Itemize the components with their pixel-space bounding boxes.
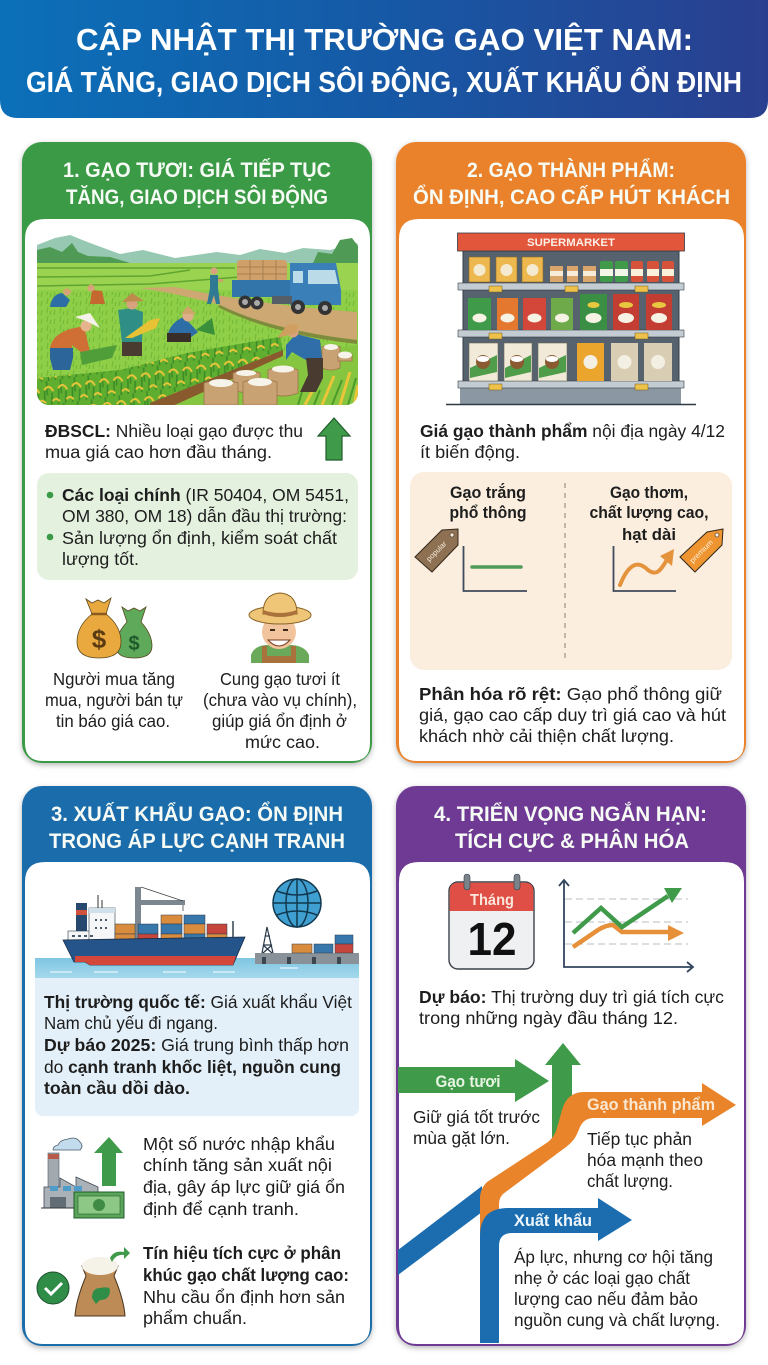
road (140, 287, 357, 340)
text: Mekong delta prices: mua giá cao hơn đầu tháng. (45, 442, 272, 462)
text: positive premium signal (143, 1243, 349, 1328)
text: buyers and sellers (45, 669, 183, 731)
arrow: export diagonal (398, 1186, 482, 1275)
text: forecast: Dự báo: Thị trường duy trì giá tích cực (419, 987, 724, 1007)
text: clear segmentation: Phân hóa rõ rệt: Gạo phổ thông giữ (419, 684, 722, 704)
text: forecast: trong những ngày đầu tháng 12. (419, 1008, 678, 1028)
icon: farmer (249, 593, 311, 663)
text: buyers and sellers: mua, người bán tự (45, 690, 183, 710)
icon: factory, arrow, banknote (41, 1137, 124, 1218)
callout: international market: do cạnh tranh khốc liệt, nguồn cung (44, 1057, 341, 1077)
icon: money bags: $ (92, 624, 107, 654)
arrow: exports: Xuất khẩu (514, 1211, 592, 1230)
icon: globe (273, 879, 321, 927)
text: fresh rice outlook (413, 1107, 540, 1148)
heading 1: TĂNG, GIAO DỊCH SÔI ĐỘNG (66, 185, 328, 209)
icon: premium tag: premium (688, 538, 715, 565)
text: finished rice outlook: chất lượng. (587, 1171, 673, 1191)
callout: main rice types: Các loại chính (IR 50404, OM 5451, (62, 485, 349, 505)
text: finished rice outlook: hóa mạnh theo (587, 1150, 703, 1170)
text: domestic price (420, 421, 725, 462)
text: finished rice outlook (587, 1129, 703, 1191)
callout: international market (35, 960, 359, 1116)
ditch (150, 350, 283, 405)
text: export outlook: nhẹ ở các loại gạo chất (514, 1268, 690, 1288)
text: importers raise production: Một số nước nhập khẩu (143, 1134, 335, 1154)
arrow: exports (480, 1198, 632, 1343)
text: positive premium signal: phẩm chuẩn. (143, 1308, 247, 1328)
label: premium rice: hạt dài (622, 525, 676, 544)
farmers (50, 268, 323, 392)
illustration: rice field harvest with truck (37, 235, 358, 405)
text: domestic price: Giá gạo thành phẩm nội địa ngày 4/12 (420, 421, 725, 441)
text: importers raise production: định để cạnh tranh. (143, 1199, 299, 1219)
callout: international market: Dự báo 2025: Giá trung bình thấp hơn (44, 1035, 349, 1055)
heading 3: 3. XUẤT KHẨU GẠO: ỔN ĐỊNH (51, 802, 343, 826)
arrow: finished rice (480, 1083, 736, 1240)
panel 2: finished rice (396, 142, 746, 763)
text: importers raise production: chính tăng sản xuất nội (143, 1155, 332, 1175)
icon: popular tag (415, 529, 458, 572)
comparison box (410, 472, 732, 670)
label: regular white rice: Gạo trắng (450, 483, 526, 502)
chart: price outlook lines (559, 880, 693, 972)
truck (232, 260, 341, 315)
callout: main rice types: Sản lượng ổn định, kiểm soát chất (62, 528, 337, 548)
label: premium rice (590, 483, 708, 544)
icon: calendar December: Tháng (470, 892, 514, 909)
panel 1: fresh rice (22, 142, 372, 763)
text: short fresh rice supply: mức cao. (245, 732, 320, 752)
text: Mekong delta prices (45, 421, 303, 462)
text: finished rice outlook: Tiếp tục phản (587, 1129, 692, 1149)
arrow: finished rice: Gạo thành phẩm (587, 1095, 715, 1114)
text: domestic price: ít biến động. (420, 442, 520, 462)
panel 4: short-term outlook (396, 786, 746, 1346)
foreground rice rows (37, 337, 283, 405)
text: Mekong delta prices: ĐBSCL: Nhiều loại gạo được thu (45, 421, 303, 441)
icon: check mark and rice sack (37, 1247, 130, 1316)
icon: up arrow (318, 418, 350, 460)
rice sacks (204, 345, 352, 405)
illustration: supermarket shelves: SUPERMARKET (527, 237, 615, 249)
text: importers raise production: địa, gây áp lực giữ giá ổn (143, 1177, 345, 1197)
icon: premium tag (680, 529, 723, 572)
heading 2 (413, 159, 730, 209)
label: premium rice: chất lượng cao, (590, 503, 708, 522)
callout: main rice types (37, 473, 358, 580)
text: clear segmentation: khách nhờ cải thiện chất lượng. (419, 726, 674, 746)
callout: main rice types: lượng tốt. (62, 549, 139, 569)
text: export outlook: Áp lực, nhưng cơ hội tăng (514, 1247, 713, 1267)
callout: international market: Thị trường quốc tế: Giá xuất khẩu Việt (44, 992, 352, 1012)
illustration: container ship at port (35, 887, 359, 978)
label: regular white rice (450, 483, 526, 522)
icon: calendar December: 12 (468, 913, 516, 965)
heading 2: ỔN ĐỊNH, CAO CẤP HÚT KHÁCH (413, 185, 730, 209)
heading 3: TRONG ÁP LỰC CẠNH TRANH (49, 830, 345, 853)
text: fresh rice outlook: mùa gặt lớn. (413, 1128, 510, 1148)
text: export outlook: nguồn cung và chất lượng. (514, 1310, 720, 1330)
text: short fresh rice supply (203, 669, 357, 752)
callout: main rice types: OM 380, OM 18) dẫn đầu thị trường: (62, 505, 347, 526)
text: positive premium signal: Nhu cầu ổn định hơn sản (143, 1287, 345, 1307)
callout: international market: toàn cầu dồi dào. (44, 1078, 190, 1098)
arrow: fresh rice: Gạo tươi (436, 1072, 500, 1091)
text: buyers and sellers: tin báo giá cao. (56, 711, 170, 731)
title banner: CẬP NHẬT THỊ TRƯỜNG GẠO VIỆT NAM: (76, 21, 693, 57)
label: premium rice: Gạo thơm, (610, 483, 688, 502)
chart: rising price (614, 546, 676, 591)
text: export outlook: lượng cao nếu đảm bảo (514, 1289, 698, 1309)
text: export outlook (514, 1247, 720, 1330)
callout: international market: Nam chủ yếu đi ngang. (44, 1013, 218, 1033)
label: regular white rice: phổ thông (450, 503, 526, 522)
heading 4: TÍCH CỰC & PHÂN HÓA (455, 829, 689, 853)
text: fresh rice outlook: Giữ giá tốt trước (413, 1107, 540, 1127)
icon: calendar December (449, 874, 534, 969)
text: short fresh rice supply: giúp giá ổn định ở (212, 711, 347, 731)
heading 2: 2. GẠO THÀNH PHẨM: (467, 159, 675, 182)
text: buyers and sellers: Người mua tăng (53, 669, 175, 689)
heading 3 (49, 802, 345, 853)
illustration: supermarket shelves (446, 233, 696, 404)
heading 1: 1. GẠO TƯƠI: GIÁ TIẾP TỤC (63, 159, 331, 182)
heading 4: 4. TRIỂN VỌNG NGẮN HẠN: (434, 802, 707, 826)
text: positive premium signal: khúc gạo chất lượng cao: (143, 1265, 349, 1285)
text: clear segmentation (419, 684, 726, 746)
text: short fresh rice supply: (chưa vào vụ chính), (203, 690, 357, 710)
text: short fresh rice supply: Cung gạo tươi ít (220, 669, 340, 689)
arrow: fresh rice (398, 1043, 581, 1140)
icon: money bags (77, 598, 152, 658)
panel 3: rice exports (22, 786, 372, 1346)
text: forecast (419, 987, 724, 1028)
text: clear segmentation: giá, gạo cao cấp duy trì giá cao và hút (419, 705, 726, 725)
text: positive premium signal: Tín hiệu tích cực ở phân (143, 1243, 341, 1263)
heading 1 (63, 159, 331, 209)
title banner (0, 0, 768, 118)
heading 4 (434, 802, 707, 853)
icon: popular tag: popular (424, 539, 449, 563)
icon: money bags: $ (128, 633, 140, 655)
chart: flat price (464, 546, 527, 591)
text: importers raise production (143, 1134, 345, 1219)
